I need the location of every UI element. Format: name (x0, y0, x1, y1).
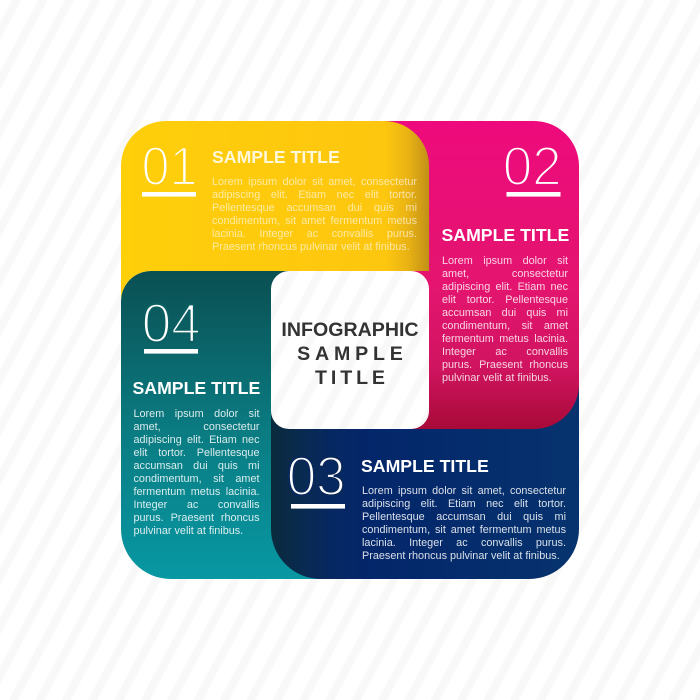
body text 02: elit tortor. Pellentesque (442, 294, 568, 306)
body text 03: lacinia. Integer ac convallis purus. (362, 537, 566, 549)
body text 02: purus. Praesent rhoncus (442, 359, 568, 371)
body text 02: Lorem ipsum dolor sit (442, 255, 568, 267)
body text 03: adipiscing elit. Etiam nec elit tortor. (362, 498, 566, 510)
title 01: SAMPLE TITLE (212, 147, 340, 167)
number 02: 02 (503, 135, 562, 197)
body text 01: Praesent rhoncus pulvinar velit at finibus. (212, 241, 410, 253)
body text 02: accumsan dui quis mi (442, 307, 568, 319)
panel: 04 teal (121, 271, 320, 579)
navy shape with number 03 (271, 384, 579, 579)
body text 02 (442, 255, 568, 384)
body text 02: adipiscing elit. Etiam nec (442, 281, 568, 293)
body text 03: Praesent rhoncus pulvinar velit at finibus. (362, 550, 560, 562)
body text 02: amet, consectetur (442, 268, 568, 280)
body text 03: Lorem ipsum dolor sit amet, consectetur (362, 485, 566, 497)
yellow shape with number 01 (121, 121, 429, 300)
body text 04: elit tortor. Pellentesque (134, 447, 260, 459)
body text 04: Lorem ipsum dolor sit (134, 408, 260, 420)
panel: 02 pink (384, 121, 579, 429)
panel: 03 navy (271, 384, 579, 579)
number 03: 03 (287, 445, 346, 507)
pink shape with number 02 (384, 121, 579, 429)
body text 01 (212, 176, 417, 253)
body text 04: condimentum, sit amet (134, 473, 260, 485)
body text 04: adipiscing elit. Etiam nec (134, 434, 260, 446)
body text 03: Pellentesque accumsan dui quis mi (362, 511, 566, 523)
title 02: SAMPLE TITLE (442, 225, 569, 245)
body text 02: Integer ac convallis (442, 346, 568, 358)
body text 03 (362, 485, 566, 562)
body text 04: accumsan dui quis mi (134, 460, 260, 472)
body text 01: condimentum, sit amet fermentum metus (212, 215, 417, 227)
heading line: TITLE: TITLE (315, 367, 389, 389)
body text 02: fermentum metus lacinia. (442, 333, 568, 345)
body text 01: Pellentesque accumsan dui quis mi (212, 202, 417, 214)
body text 02: condimentum, sit amet (442, 320, 568, 332)
body text 04: fermentum metus lacinia. (134, 486, 260, 498)
body text 04: Integer ac convallis (134, 499, 260, 511)
heading line: INFOGRAPHIC: INFOGRAPHIC (281, 319, 419, 341)
panel: 01 yellow (121, 121, 429, 300)
number 04: 04 (142, 292, 201, 354)
body text 04: purus. Praesent rhoncus (134, 512, 260, 524)
body text 02: pulvinar velit at finibus. (442, 372, 552, 384)
title 04: SAMPLE TITLE (132, 378, 260, 398)
body text 01: lacinia. Integer ac convallis purus. (212, 228, 417, 240)
teal shape with number 04 (121, 271, 320, 579)
body text 01: adipiscing elit. Etiam nec elit tortor. (212, 189, 417, 201)
body text 04: amet, consectetur (134, 421, 260, 433)
panel: center title (271, 271, 429, 429)
body text 04: pulvinar velit at finibus. (134, 525, 243, 537)
body text 03: condimentum, sit amet fermentum metus (362, 524, 566, 536)
title 03: SAMPLE TITLE (361, 456, 489, 476)
body text 04 (134, 408, 260, 537)
number 01: 01 (142, 135, 198, 197)
heading line: SAMPLE: SAMPLE (297, 343, 408, 365)
body text 01: Lorem ipsum dolor sit amet, consectetur (212, 176, 417, 188)
